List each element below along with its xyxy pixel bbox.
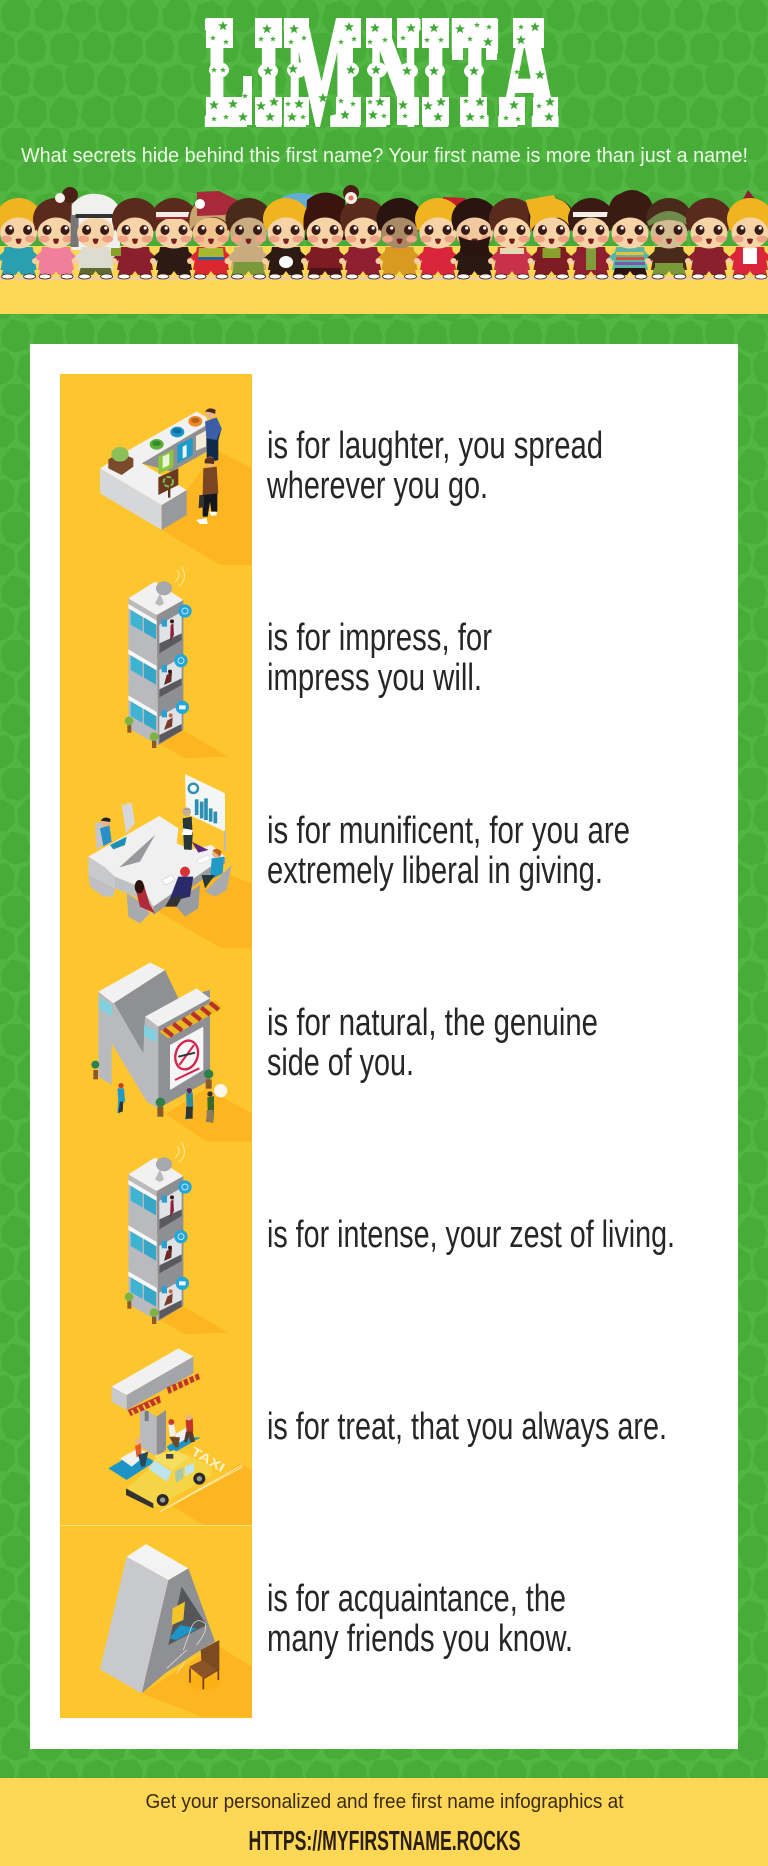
text: N: side of you. <box>267 1042 414 1084</box>
subtitle: What secrets hide behind this first name? Your first name is more than just a name! <box>21 145 748 167</box>
character: blond in red apron <box>414 197 466 279</box>
panel: M isometric meeting table <box>60 758 252 950</box>
text: M: is for munificent, for you are <box>267 810 630 852</box>
footer url: HTTPS://MYFIRSTNAME.ROCKS <box>248 1825 520 1856</box>
character: tribal grass skirt <box>224 198 272 279</box>
character: blond in dark robe <box>526 195 576 279</box>
text: M: extremely liberal in giving. <box>267 850 603 892</box>
title letters <box>205 0 558 159</box>
character parade <box>0 185 768 279</box>
panel: L isometric recycling desk <box>60 374 252 566</box>
text: I: impress you will. <box>267 657 482 699</box>
panel: N isometric building with no smoking sign <box>60 950 252 1142</box>
character: blond boy in blue overalls <box>0 198 43 279</box>
text: M <box>267 810 630 892</box>
title stars <box>209 21 555 122</box>
text: L <box>266 425 603 507</box>
text: L: is for laughter, you spread <box>267 425 603 467</box>
text: N <box>267 1002 598 1084</box>
character: girl in pink kimono <box>32 187 80 279</box>
panel: I isometric office tower (repeat) <box>60 1142 252 1334</box>
title star plaques <box>206 18 558 125</box>
footer tagline: Get your personalized and free first name infographics at <box>146 1791 624 1813</box>
text: A: many friends you know. <box>267 1618 573 1660</box>
character: striped shirt <box>606 190 656 279</box>
character: brown skin orange robe <box>376 198 424 279</box>
footer band <box>0 1778 768 1866</box>
panel: T isometric taxi stand: TAXI <box>188 1444 227 1475</box>
main white panel <box>30 344 738 1749</box>
character: red hat <box>187 191 241 279</box>
character: blond maid <box>262 193 324 279</box>
panel: A isometric letter with desk and chair <box>60 1525 252 1718</box>
text: N: is for natural, the genuine <box>267 1002 598 1044</box>
character: band with green scarf <box>567 198 615 279</box>
character: tall dark hair <box>301 192 349 279</box>
yellow band behind characters <box>0 246 768 314</box>
text: L: wherever you go. <box>266 465 488 507</box>
text: A <box>267 1578 573 1660</box>
character: angry girl <box>685 198 733 279</box>
character: girl with flower <box>339 185 387 279</box>
character: blond with red vest <box>726 190 768 279</box>
text: I: is for impress, for <box>267 617 492 659</box>
character: green hat <box>645 198 693 279</box>
text: A: is for acquaintance, the <box>267 1578 566 1620</box>
character: bearded man <box>450 198 498 279</box>
panel: I isometric office tower <box>60 566 252 758</box>
character: dotted skirt <box>488 198 536 279</box>
title: LIMNITA <box>205 0 558 159</box>
character: arab headdress <box>71 194 122 279</box>
character: girl in red dress <box>111 198 159 279</box>
panel: T isometric taxi stand <box>60 1334 252 1526</box>
text: I <box>267 617 492 699</box>
character: tribal band <box>150 198 198 279</box>
